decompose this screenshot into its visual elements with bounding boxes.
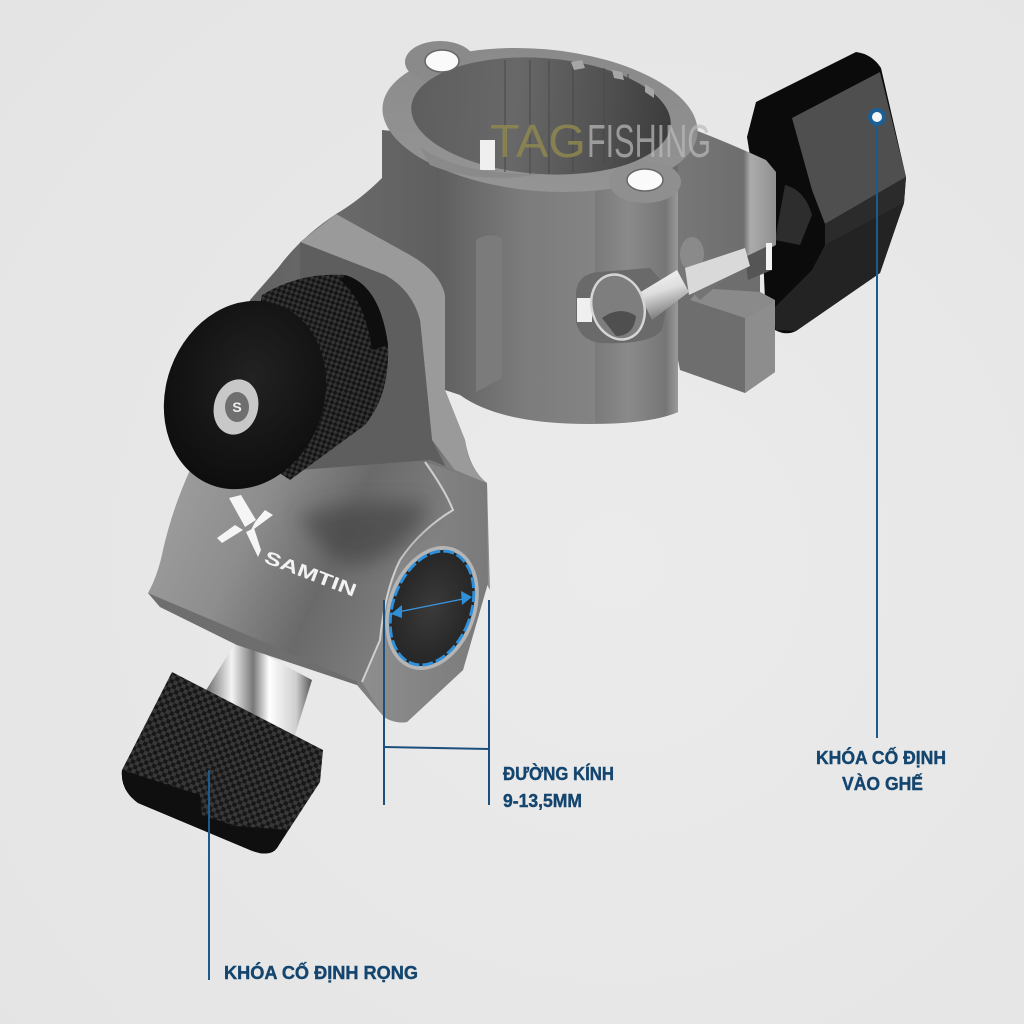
callout: wing lock line and dot [868,108,886,738]
side rib [476,235,502,392]
chrome stud [205,640,312,745]
upper clamp flange [660,118,776,300]
icon: black wing locking knob [747,52,906,333]
hex screw: S [232,399,242,415]
label: KHÓA CỐ ĐỊNH VÀO GHẾ [816,747,946,794]
watermark: TAG FISHING [490,115,711,167]
label: KHÓA CỐ ĐỊNH VÀO GHẾ: KHÓA CỐ ĐỊNH [816,747,946,768]
lower tube block [148,460,495,722]
bolt holes [425,50,663,191]
front bolt column [595,180,678,423]
tube opening [369,533,495,683]
lower knurled knob [122,672,323,854]
upper knurled knob [138,275,388,512]
pivot arm [190,214,490,590]
label: ĐƯỜNG KÍNH 9-13,5MM: 9-13,5MM [503,791,582,811]
ring ear: rear [405,41,475,83]
blue dashed diameter ring [375,539,489,677]
label: KHÓA CỐ ĐỊNH VÀO GHẾ: VÀO GHẾ [842,773,923,794]
hex screw [208,374,264,440]
callout: diameter dimension lines [384,600,489,805]
lower clamp flange [670,250,775,393]
callout: spoke lock line [208,770,210,980]
logo: SAMTIN [217,495,359,600]
watermark: TAG FISHING: FISHING [587,115,711,167]
label: ĐƯỜNG KÍNH 9-13,5MM [503,763,614,811]
watermark: TAG FISHING: TAG [490,115,586,167]
steel bolt [583,237,772,346]
ring opening [407,49,675,183]
clamp ring top [376,35,704,205]
bolt slot [576,268,670,343]
diameter arrow [391,591,472,618]
ring ear: front [609,161,681,203]
clamp main body [336,130,678,424]
rear pin [680,237,704,271]
label: ĐƯỜNG KÍNH 9-13,5MM: ĐƯỜNG KÍNH [503,763,614,784]
logo: SAMTIN: SAMTIN [262,547,359,600]
label: KHÓA CỐ ĐỊNH RỌNG: KHÓA CỐ ĐỊNH RỌNG [224,962,418,983]
